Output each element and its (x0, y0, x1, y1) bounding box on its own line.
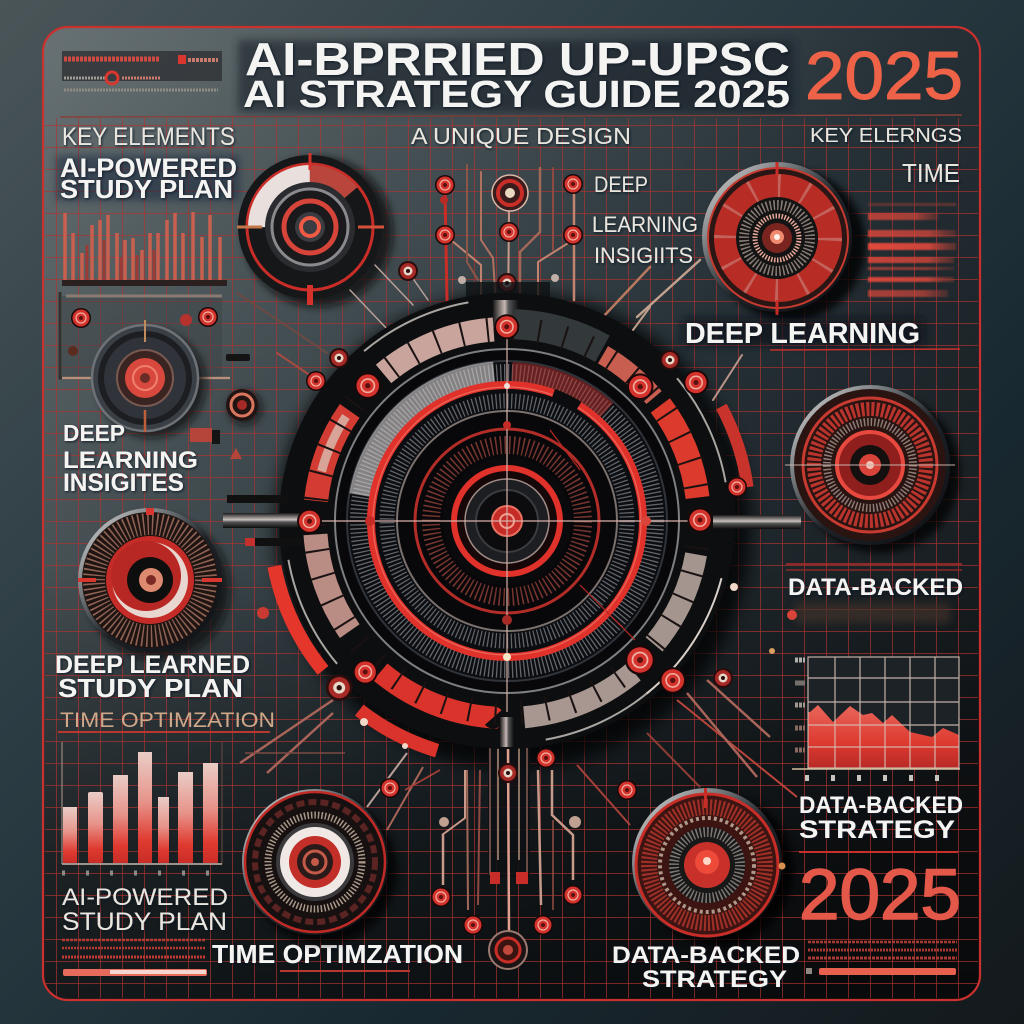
label: time optimization tan: TIME OPTIMZATION (60, 709, 275, 732)
small caption block top left (62, 51, 222, 90)
blurred caption under data-backed (769, 603, 950, 654)
title line 1: AI-BPRRIED UP-UPSC (245, 33, 790, 85)
dial base disc (279, 293, 735, 749)
label: deep learning insights top: INSIGIITS (594, 243, 693, 268)
label: data-backed strategy right: STRATEGY (799, 816, 955, 844)
label: deep learning insights left: INSIGITES (63, 469, 184, 497)
label: data-backed right: DATA-BACKED (788, 574, 963, 601)
node dial bottom center (489, 931, 527, 969)
small decorative blips left (190, 354, 250, 459)
black band (335, 349, 679, 693)
dial: top left A (237, 153, 393, 307)
label: deep learning insights left: LEARNING (63, 447, 198, 474)
crosshair (318, 330, 695, 712)
panel: bracket with knob (60, 292, 230, 378)
bottom connector nodes (380, 668, 733, 935)
label: AI-powered study plan bottom: STUDY PLAN (62, 908, 227, 936)
label: AI-powered study plan bottom (62, 884, 228, 936)
dial: bottom left F (242, 789, 397, 944)
label: deep learned study plan (55, 651, 250, 703)
year heading bottom right: 2025 (799, 856, 961, 935)
caption lines with progress bar (62, 940, 207, 976)
label: deep learning insights left: DEEP (63, 420, 125, 446)
heading: unique design: A UNIQUE DESIGN (411, 123, 631, 149)
blurred red bars right (868, 203, 956, 297)
area chart (792, 657, 960, 778)
dial: left C (78, 508, 230, 660)
shadow behind main dial (275, 292, 751, 768)
label: data-backed strategy bottom: STRATEGY (642, 966, 787, 993)
label: deep learning right: DEEP LEARNING (685, 318, 920, 350)
year heading top right: 2025 (805, 38, 963, 114)
hatch rings (333, 347, 681, 695)
wires and connectors: bottom (240, 680, 797, 935)
dial: right E (785, 385, 960, 553)
label: AI-powered study plan bottom: AI-POWERED (62, 884, 228, 911)
label: deep learning insights top: DEEP (594, 172, 648, 197)
title header block (238, 33, 794, 116)
main dial (174, 188, 840, 854)
label: data-backed strategy bottom: DATA-BACKED (612, 942, 800, 969)
caption lines bottom right (806, 942, 957, 975)
small knob left (226, 389, 262, 425)
title line 2: AI STRATEGY GUIDE 2025 (243, 74, 790, 116)
node dial top center (492, 175, 528, 211)
main dial bolts (297, 314, 747, 749)
label: data-backed strategy bottom (612, 942, 800, 993)
label: deep learning insights top: LEARNING (592, 212, 698, 237)
heading: key elements left: KEY ELEMENTS (62, 123, 235, 151)
metal arms (223, 300, 801, 747)
bar chart: thin bars (62, 212, 227, 286)
label: time optimization white: TIME OPTIMZATION (212, 939, 463, 969)
label: deep learning insights top (592, 172, 698, 268)
label: deep learned study plan: DEEP LEARNED (55, 651, 250, 679)
label: time top right: TIME (902, 158, 960, 188)
dial: top right D (702, 162, 866, 321)
wires and connectors: top (237, 165, 742, 400)
column housing top center (466, 282, 550, 332)
label: AI-powered study plan top: STUDY PLAN (60, 174, 233, 204)
small bolt near dial C (257, 607, 269, 619)
inner rings (397, 411, 617, 631)
label: data-backed strategy right (799, 792, 963, 852)
top connector nodes (398, 174, 583, 293)
label: AI-powered study plan top: AI-POWERED (60, 153, 237, 183)
dial: left B (92, 320, 206, 438)
label: deep learning insights left (63, 420, 198, 497)
heading: key elements right: KEY ELERNGS (810, 125, 962, 147)
label: deep learned study plan: STUDY PLAN (58, 673, 243, 703)
bar chart: gradient bars (62, 742, 222, 873)
column housing bottom center (488, 745, 530, 877)
label: data-backed strategy right: DATA-BACKED (799, 792, 963, 819)
label: AI-powered study plan top (56, 153, 240, 204)
dial: bottom right G (632, 788, 794, 946)
outer ring segments (174, 188, 840, 854)
